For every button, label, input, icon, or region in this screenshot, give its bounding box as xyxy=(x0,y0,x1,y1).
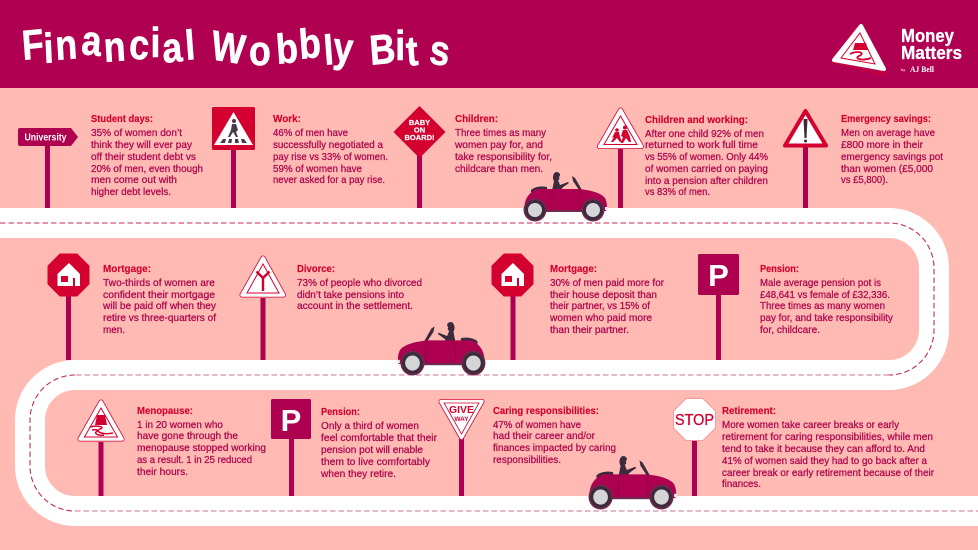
car 2 xyxy=(397,322,485,375)
text: Mortgage 2: their house deposit than xyxy=(550,289,657,301)
text: Menopause: as a result. 1 in 25 reduced xyxy=(137,454,252,466)
text: Mortgage 1: Mortgage: xyxy=(103,263,151,275)
logo wordmark: by xyxy=(901,67,905,72)
text: Retirement: More women take career breaks or early xyxy=(722,419,900,431)
sign: Y junction xyxy=(242,258,284,360)
sign: stop xyxy=(674,398,716,496)
text: Retirement: tend to take it because they can afford to. And xyxy=(722,443,925,455)
text: Mortgage 2: women who paid more xyxy=(549,312,652,324)
logo icon: skidding car triangle xyxy=(832,26,884,75)
text: Pension 2: pension pot will enable xyxy=(321,444,423,456)
sign: stop: STOP xyxy=(675,412,714,429)
text: Caring responsibilities: Caring responsibilities: xyxy=(493,405,599,417)
text: Work: successfully negotiated a xyxy=(273,139,383,151)
text: Children and working: returned to work full time xyxy=(645,139,758,151)
text: Children and working: into a pension after children xyxy=(645,175,768,187)
text: Pension 1: for, childcare. xyxy=(760,324,820,336)
text: Pension 2: when they retire. xyxy=(320,468,396,480)
text: Children and working: vs 83% of men. xyxy=(645,186,710,198)
sign: give way xyxy=(441,402,482,496)
text: Student days: 35% of women don’t xyxy=(91,127,182,139)
text: Emergency savings: emergency savings pot xyxy=(841,151,943,163)
text: Pension 2: Pension: xyxy=(321,406,360,418)
text: Divorce xyxy=(297,263,422,312)
text: Student days: think they will ever pay xyxy=(91,139,193,151)
text: Emergency savings: Men on average have xyxy=(841,127,935,139)
text: Emergency savings xyxy=(841,113,943,186)
text: Work: never asked for a pay rise. xyxy=(273,174,385,186)
text: Children: Children: xyxy=(455,113,498,125)
text: Mortgage 2 xyxy=(549,263,664,336)
text: Mortgage 1: will be paid off when they xyxy=(102,300,217,312)
sign: give way: WAY xyxy=(454,416,469,423)
sign: children crossing xyxy=(600,110,642,208)
text: Divorce: didn’t take pensions into xyxy=(297,289,404,301)
sign: parking 1 xyxy=(698,254,739,360)
text: Work xyxy=(273,113,388,186)
text: Menopause: have gone through the xyxy=(137,430,238,442)
text: Caring responsibilities: responsibilities. xyxy=(493,454,561,466)
text: Student days: men come out with xyxy=(91,174,177,186)
header band xyxy=(0,0,978,88)
text: Retirement: career break or early retirement because of their xyxy=(722,467,934,479)
text: Divorce: account in the settlement. xyxy=(297,300,413,312)
text: Caring responsibilities: 47% of women have xyxy=(493,419,581,431)
sign: warning exclamation xyxy=(785,111,826,208)
sign: pedestrian crossing xyxy=(212,107,255,208)
text: Children and working: vs 55% of women. Only 44% xyxy=(645,151,768,163)
text: Mortgage 2: their partner, vs 15% of xyxy=(550,300,650,312)
text: Mortgage 1: men. xyxy=(103,324,125,336)
text: Children and working: of women carried on paying xyxy=(645,163,768,175)
text: Pension 2: Only a third of women xyxy=(321,420,419,432)
text: Mortgage 1: Two-thirds of women are xyxy=(103,277,215,289)
sign: mortgage house 1 xyxy=(48,254,89,360)
text: Retirement: retirement for caring responsibilities, while men xyxy=(722,431,933,443)
text: Children and working xyxy=(645,114,768,198)
car 3 xyxy=(589,456,677,509)
text: Pension 1: Pension: xyxy=(760,263,799,275)
text: Pension 1: Male average pension pot is xyxy=(760,277,881,289)
text: Work: 46% of men have xyxy=(273,127,348,139)
text: Pension 1: £48,641 vs female of £32,336. xyxy=(760,289,890,301)
text: Mortgage 2: 30% of men paid more for xyxy=(550,277,664,289)
text: Work: pay rise vs 33% of women. xyxy=(273,151,388,163)
sign: University xyxy=(18,128,78,208)
sign: baby on board xyxy=(394,107,444,208)
text: Menopause: 1 in 20 women who xyxy=(137,419,223,431)
text: Children: take responsibility for, xyxy=(455,151,552,163)
text: Student days: off their student debt vs xyxy=(91,151,196,163)
sign: mortgage house 2 xyxy=(492,254,533,360)
text: Caring responsibilities: had their career and/or xyxy=(493,430,595,442)
text: Mortgage 1: retire vs three-quarters of xyxy=(103,312,216,324)
sign: baby on board: BOARD! xyxy=(404,133,434,142)
text: Children and working: Children and working: xyxy=(645,114,748,126)
text: Divorce: 73% of people who divorced xyxy=(297,277,422,289)
logo wordmark: Money xyxy=(901,26,954,46)
text: Caring responsibilities xyxy=(493,405,616,466)
text: Caring responsibilities: finances impacted by caring xyxy=(493,442,616,454)
sign: University: University xyxy=(24,132,67,144)
text: Mortgage 2: than their partner. xyxy=(550,324,629,336)
sign: parking 1: P xyxy=(708,258,729,293)
text: Retirement xyxy=(722,405,934,490)
logo: Money Matters by AJ Bell xyxy=(832,26,962,75)
text: Pension 2: them to live comfortably xyxy=(321,456,431,468)
sign: parking 2 xyxy=(271,399,311,496)
text: Student days xyxy=(91,113,203,198)
text: Retirement: 41% of women said they had to go back after a xyxy=(722,455,927,467)
text: Pension 1: Three times as many women xyxy=(760,300,885,312)
text: Work: 59% of women have xyxy=(273,163,362,175)
text: Children xyxy=(454,113,552,175)
text: Menopause: Menopause: xyxy=(137,405,193,417)
text: Menopause xyxy=(137,405,266,478)
text: Menopause: their hours. xyxy=(137,466,188,478)
text: Student days: 20% of men, even though xyxy=(91,163,203,175)
text: Divorce: Divorce: xyxy=(297,263,335,275)
text: Emergency savings: vs £5,800). xyxy=(841,174,888,186)
text: Emergency savings: Emergency savings: xyxy=(841,113,931,125)
car 1 xyxy=(524,172,608,222)
sign: give way: GIVE xyxy=(449,405,474,416)
sign: parking 2: P xyxy=(281,403,301,438)
text: Children: women pay for, and xyxy=(454,139,543,151)
text: Children and working: After one child 92% of men xyxy=(645,128,764,140)
text: Retirement: finances. xyxy=(722,478,761,490)
sign: slippery road xyxy=(80,402,122,496)
text: Pension 1 xyxy=(760,263,894,336)
text: Emergency savings: than women (£5,000 xyxy=(841,163,933,175)
title: Financial Wobbly Bits xyxy=(20,18,452,76)
sign: baby on board: BABY xyxy=(409,118,430,127)
text: Mortgage 2: Mortgage: xyxy=(550,263,597,275)
text: Student days: higher debt levels. xyxy=(91,186,171,198)
logo wordmark xyxy=(901,26,962,74)
text: Menopause: menopause stopped working xyxy=(137,442,266,454)
road xyxy=(0,223,978,511)
text: Pension 2 xyxy=(320,406,437,480)
sign: baby on board: ON xyxy=(414,126,425,134)
text: Emergency savings: £800 more in their xyxy=(841,139,923,151)
text: Retirement: Retirement: xyxy=(722,405,776,417)
text: Pension 2: feel comfortable that their xyxy=(321,432,437,444)
text: Mortgage 1: confident their mortgage xyxy=(103,289,215,301)
logo wordmark: Matters xyxy=(901,43,962,63)
text: Student days: Student days: xyxy=(91,113,153,125)
logo wordmark: AJ Bell xyxy=(910,65,935,74)
text: Work: Work: xyxy=(273,113,301,125)
text: Children: childcare than men. xyxy=(455,163,543,175)
text: Mortgage 1 xyxy=(102,263,217,336)
text: Children: Three times as many xyxy=(455,127,547,139)
text: Pension 1: pay for, and take responsibility xyxy=(760,312,894,324)
